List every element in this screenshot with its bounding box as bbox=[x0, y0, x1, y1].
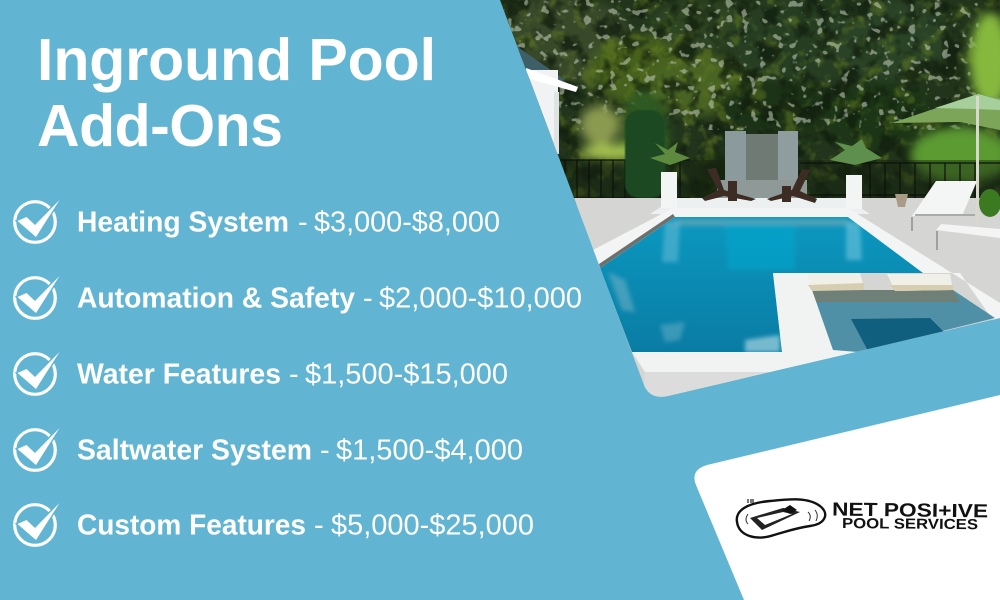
title: Inground Pool bbox=[37, 27, 436, 93]
price: - bbox=[363, 282, 373, 314]
patio chairs bbox=[702, 168, 817, 203]
price: - bbox=[320, 434, 330, 466]
logo tagline: POOL SERVICES bbox=[842, 516, 978, 533]
icon: check circle bbox=[15, 352, 60, 394]
list item: Automation & Safety bbox=[15, 276, 582, 318]
price: - bbox=[314, 510, 324, 542]
icon: check circle bbox=[15, 276, 60, 318]
list item: Custom Features bbox=[15, 503, 534, 545]
list item: Heating System: $3,000-$8,000 bbox=[314, 206, 500, 238]
logo icon: pool with lounger bbox=[737, 499, 825, 537]
icon: check circle bbox=[15, 503, 60, 545]
label: Automation & Safety bbox=[77, 282, 355, 314]
title: Add-Ons bbox=[37, 93, 283, 159]
umbrella bbox=[892, 94, 1000, 226]
price: - bbox=[289, 358, 299, 390]
fence bbox=[560, 160, 1000, 200]
logo wordmark: NET POSI+IVE bbox=[832, 500, 988, 522]
list item: Water Features bbox=[15, 352, 508, 394]
list item: Custom Features: $5,000-$25,000 bbox=[331, 510, 534, 542]
list item: Water Features: $1,500-$15,000 bbox=[305, 358, 508, 390]
spa bbox=[773, 273, 995, 368]
label: Water Features bbox=[77, 358, 281, 390]
icon: check circle bbox=[15, 428, 60, 470]
list item: Automation & Safety: $2,000-$10,000 bbox=[379, 282, 582, 314]
label: Heating System bbox=[77, 206, 289, 238]
palms and planters bbox=[650, 139, 908, 209]
trees bbox=[490, 0, 1000, 205]
pool water bbox=[600, 217, 927, 352]
pool coping bbox=[593, 208, 1000, 397]
logo: Net Positive Pool Services bbox=[737, 499, 988, 537]
logo panel bbox=[694, 395, 1000, 600]
stone water wall bbox=[717, 131, 807, 198]
title bbox=[37, 27, 436, 159]
label: Custom Features bbox=[77, 510, 306, 542]
list item: Saltwater System bbox=[15, 428, 523, 470]
icon: check circle bbox=[15, 200, 60, 242]
label: Saltwater System bbox=[77, 434, 312, 466]
lounge chairs bbox=[912, 181, 1000, 250]
photo: pool and backyard bbox=[490, 0, 1000, 400]
price: - bbox=[298, 206, 308, 238]
list item: Heating System bbox=[15, 200, 500, 242]
house bbox=[515, 45, 578, 154]
deck bbox=[574, 198, 1000, 397]
list item: Saltwater System: $1,500-$4,000 bbox=[336, 434, 523, 466]
